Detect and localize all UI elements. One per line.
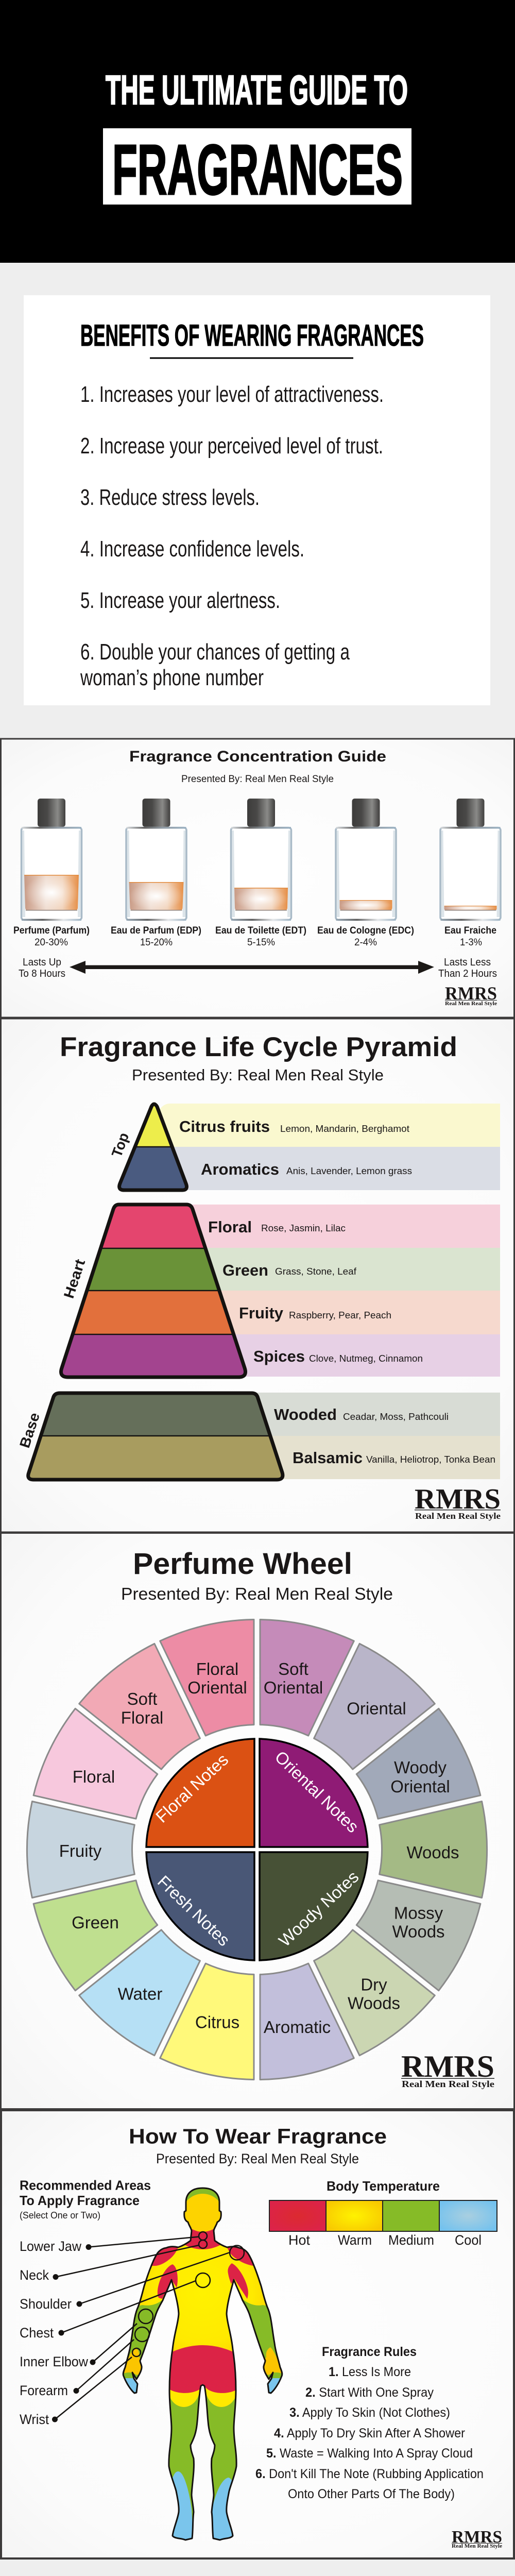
note labels: Lemon, Mandarin, Berghamot: [280, 1123, 409, 1134]
bottle labels: Eau de Cologne (EDC): [317, 925, 414, 936]
wheel core quadrants: [146, 1739, 368, 1960]
bottle labels: 20-30%: [35, 937, 68, 948]
panel: benefits of wearing fragrances: [24, 295, 490, 705]
note labels: Vanilla, Heliotrop, Tonka Bean: [366, 1454, 495, 1465]
benefits list: 2. Increase your perceived level of trust.: [80, 433, 383, 459]
note labels: Floral: [208, 1218, 252, 1236]
arrow: longevity: [70, 961, 434, 974]
wheel core labels: Woody Notes: [275, 1867, 362, 1951]
note labels: Citrus fruits: [179, 1117, 270, 1136]
logo: RMRS: Real Men Real Style: [445, 1001, 497, 1007]
note bands: [154, 1104, 500, 1479]
bottle: eau fraiche: [440, 799, 501, 921]
wheel wedge labels: Woods: [406, 1843, 459, 1862]
wheel wedge labels: Floral: [121, 1708, 163, 1727]
note labels: Aromatics: [201, 1160, 279, 1178]
wheel wedge labels: Green: [72, 1913, 119, 1932]
wheel wedge labels: Oriental: [187, 1678, 247, 1697]
bottle labels: Eau Fraiche: [444, 925, 496, 936]
bottle: perfume: [22, 799, 81, 921]
bottle labels: Perfume (Parfum): [13, 925, 90, 936]
panel: fragrance concentration guide: [1, 739, 514, 1018]
bottle labels: 15-20%: [140, 937, 173, 948]
wheel wedge labels: Oriental: [390, 1777, 450, 1796]
panel: perfume wheel: [1, 1533, 514, 2109]
application point labels: Shoulder: [20, 2296, 72, 2312]
logo: RMRS: Real Men Real Style: [452, 2544, 503, 2549]
application point labels: Inner Elbow: [20, 2354, 88, 2369]
body temperature legend: Cool: [455, 2232, 482, 2248]
header banner: [0, 0, 515, 263]
longevity labels: [19, 957, 497, 979]
wheel outer wedges: [27, 1615, 487, 2084]
application point labels: Forearm: [20, 2383, 68, 2398]
application point labels: [20, 2239, 88, 2427]
benefits list: 6. Double your chances of getting a: [80, 639, 350, 665]
panel: how to wear fragrance: [1, 2110, 514, 2558]
benefits list: 4. Increase confidence levels.: [80, 536, 304, 562]
wheel wedge labels: Oriental: [347, 1699, 406, 1718]
body heat map: [118, 2184, 288, 2545]
wheel core labels: Floral Notes: [152, 1750, 232, 1826]
how to wear subheading: Presented By: Real Men Real Style: [156, 2151, 359, 2166]
note labels: Clove, Nutmeg, Cinnamon: [309, 1353, 423, 1364]
logo: RMRS: Real Men Real Style: [415, 1511, 501, 1521]
pyramid tier: heart: [59, 1202, 247, 1379]
application point labels: Chest: [20, 2325, 54, 2341]
concentration subheading: Presented By: Real Men Real Style: [181, 774, 334, 785]
wheel wedge labels: Woody: [394, 1758, 447, 1777]
body temperature legend: Hot: [288, 2232, 310, 2248]
application point labels: Wrist: [20, 2412, 49, 2427]
wheel heading: Perfume Wheel: [133, 1547, 352, 1581]
bottle labels: [13, 925, 496, 948]
longevity labels: Than 2 Hours: [438, 968, 497, 979]
wheel core labels: Fresh Notes: [154, 1872, 234, 1950]
tier label: Heart: Heart: [61, 1257, 88, 1300]
wheel wedge labels: Floral: [73, 1767, 115, 1786]
wheel wedge labels: [59, 1659, 459, 2037]
longevity labels: Lasts Up: [23, 957, 61, 968]
tier label: Top: Top: [109, 1130, 132, 1159]
fragrance rules: 2. Start With One Spray: [305, 2385, 434, 2400]
note labels: Green: [222, 1261, 268, 1279]
bottle labels: Eau de Toilette (EDT): [215, 925, 306, 936]
benefits list: 1. Increases your level of attractiveness.: [80, 382, 384, 407]
application point labels: Neck: [20, 2267, 49, 2283]
bottle: eau de parfum: [126, 799, 186, 921]
fragrance rules: Fragrance Rules: [322, 2345, 417, 2359]
fragrance rules: 6. Don't Kill The Note (Rubbing Application: [255, 2467, 484, 2481]
fragrance rules: 3. Apply To Skin (Not Clothes): [289, 2405, 450, 2420]
wheel wedge labels: Aromatic: [264, 2018, 331, 2037]
longevity labels: Lasts Less: [444, 957, 491, 968]
bottle labels: 1-3%: [460, 937, 482, 948]
wheel wedge labels: Water: [118, 1985, 162, 2003]
pyramid tier: top: [117, 1103, 188, 1192]
wheel wedge labels: Fruity: [59, 1841, 102, 1860]
bottle labels: Eau de Parfum (EDP): [111, 925, 201, 936]
note labels: Wooded: [274, 1405, 337, 1423]
note labels: Balsamic: [293, 1449, 363, 1467]
bottle labels: 5-15%: [247, 937, 275, 948]
note labels: Raspberry, Pear, Peach: [289, 1310, 391, 1320]
bottle: eau de toilette: [231, 799, 291, 921]
fragrance rules: 5. Waste = Walking Into A Spray Cloud: [266, 2446, 473, 2461]
wheel wedge labels: Floral: [196, 1659, 238, 1679]
longevity labels: To 8 Hours: [19, 968, 65, 979]
recommended areas heading: (Select One or Two): [20, 2210, 100, 2221]
pyramid tier: base: [21, 1391, 288, 1482]
logo: RMRS: RMRS: [401, 2049, 494, 2083]
benefits list: [80, 382, 384, 690]
logo: RMRS: RMRS: [452, 2528, 502, 2547]
note labels: Anis, Lavender, Lemon grass: [286, 1165, 412, 1176]
wheel core labels: Oriental Notes: [271, 1747, 363, 1836]
wheel wedge labels: Soft: [278, 1659, 308, 1679]
how to wear heading: How To Wear Fragrance: [129, 2125, 387, 2148]
pyramid subheading: Presented By: Real Men Real Style: [132, 1066, 384, 1084]
wheel core labels: [152, 1747, 363, 1951]
recommended areas heading: To Apply Fragrance: [20, 2193, 140, 2208]
logo: RMRS: RMRS: [415, 1483, 501, 1515]
recommended areas heading: [20, 2177, 151, 2221]
wheel wedge labels: Dry: [360, 1975, 387, 1994]
recommended areas heading: Recommended Areas: [20, 2177, 151, 2193]
application point labels: Lower Jaw: [20, 2239, 81, 2254]
tier label: Base: Base: [16, 1411, 43, 1450]
fragrance rules: Onto Other Parts Of The Body): [288, 2487, 455, 2501]
benefits list: 3. Reduce stress levels.: [80, 485, 260, 510]
note labels: Rose, Jasmin, Lilac: [261, 1223, 346, 1233]
note labels: Grass, Stone, Leaf: [275, 1266, 357, 1277]
fragrance rules: 4. Apply To Dry Skin After A Shower: [274, 2426, 465, 2441]
note labels: Fruity: [239, 1304, 284, 1322]
body temperature legend: [269, 2178, 497, 2248]
fragrance rules: 1. Less Is More: [329, 2365, 411, 2379]
fragrance rules: [255, 2345, 484, 2501]
wheel wedge labels: Mossy: [394, 1903, 443, 1923]
wheel wedge labels: Soft: [127, 1689, 157, 1708]
note labels: Ceadar, Moss, Pathcouli: [343, 1411, 449, 1422]
wheel wedge labels: Oriental: [264, 1678, 323, 1697]
pyramid heading: Fragrance Life Cycle Pyramid: [60, 1032, 457, 1062]
bottle: eau de cologne: [336, 799, 396, 921]
note labels: [179, 1117, 495, 1467]
application point leaders: [52, 2232, 244, 2422]
benefits list: woman’s phone number: [80, 665, 264, 690]
body temperature legend: Body Temperature: [327, 2178, 440, 2194]
wheel wedge labels: Woods: [348, 1994, 400, 2012]
wheel wedge labels: Citrus: [195, 2012, 239, 2032]
body temperature legend: Warm: [338, 2232, 372, 2248]
note labels: Spices: [253, 1347, 305, 1365]
wheel subheading: Presented By: Real Men Real Style: [121, 1584, 393, 1603]
benefits list: 5. Increase your alertness.: [80, 588, 280, 613]
logo: RMRS: RMRS: [445, 983, 497, 1004]
concentration heading: Fragrance Concentration Guide: [129, 748, 386, 765]
wheel wedge labels: Woods: [392, 1922, 445, 1941]
body temperature legend: Medium: [388, 2232, 434, 2248]
panel: fragrance life cycle pyramid: [1, 1019, 514, 1532]
bottle labels: 2-4%: [354, 937, 377, 948]
logo: RMRS: Real Men Real Style: [402, 2079, 494, 2089]
